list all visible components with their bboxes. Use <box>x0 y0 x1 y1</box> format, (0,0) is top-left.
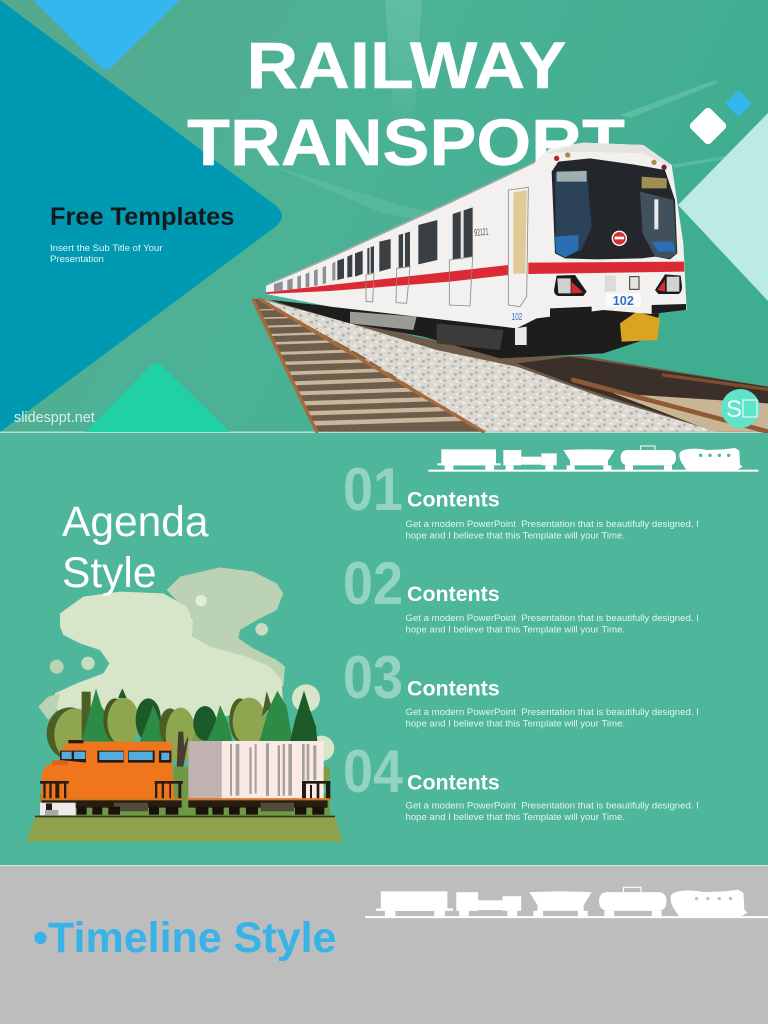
track bed <box>253 298 768 432</box>
lower black valance <box>550 307 592 317</box>
headlights <box>554 275 587 296</box>
cab door window <box>513 190 527 274</box>
contents heading 1: Contents <box>407 488 500 512</box>
shape: pale right triangle <box>678 113 768 301</box>
text: website: slidesppt.net <box>14 410 95 426</box>
locomotive windows <box>60 751 171 763</box>
title line two: TRANSPORT <box>187 105 625 179</box>
contents text 1: Get a modern PowerPoint Presentation that is beautifully designed. I <box>406 519 699 530</box>
number 01: 01 <box>343 456 403 523</box>
number 04: 04 <box>343 738 404 805</box>
number 02: 02 <box>343 550 403 617</box>
icon: white diamond <box>688 106 728 146</box>
icon: slides logo: S <box>726 396 742 423</box>
sleepers <box>258 309 473 423</box>
panel: title slide <box>0 0 768 433</box>
contents rows <box>343 456 699 823</box>
contents text 1: hope and I believe that this Template will your Time. <box>406 530 625 542</box>
shape: blue top triangle <box>33 0 180 70</box>
heading: agenda style: Agenda <box>62 499 209 546</box>
right track <box>517 357 768 432</box>
container railing <box>302 781 330 798</box>
photo: train on tracks <box>253 143 768 432</box>
photo: train on tracks: 102 <box>613 294 634 308</box>
text: subtitle: Presentation <box>50 254 104 265</box>
title: RAILWAY <box>246 28 566 102</box>
heading: agenda style: Style <box>62 550 156 597</box>
container <box>188 741 222 798</box>
locomotive railings <box>40 781 183 798</box>
panel: agenda slide <box>0 433 768 865</box>
icon: blue diamond <box>725 90 752 117</box>
ballast <box>260 299 717 432</box>
illustration: train in forest <box>27 567 343 842</box>
text: car number: 92121 <box>474 227 489 239</box>
ground <box>173 767 190 817</box>
side windows <box>337 207 473 280</box>
shape: green bottom triangle <box>85 364 230 432</box>
wheels <box>77 807 324 815</box>
locomotive body <box>42 742 174 798</box>
icon: train silhouette bottom <box>365 887 768 918</box>
heading: free templates: Free Templates <box>50 203 234 231</box>
rails <box>253 299 768 432</box>
photo: train on tracks: 102 <box>512 312 523 323</box>
panel: timeline slide <box>0 865 768 1024</box>
trees <box>47 707 93 759</box>
icon: slides logo <box>721 389 760 428</box>
contents text 2: hope and I believe that this Template will your Time. <box>406 624 625 636</box>
undercarriage <box>270 300 660 358</box>
heading: timeline style: •Timeline Style <box>33 914 336 962</box>
contents heading 4: Contents <box>407 770 500 794</box>
icon: train silhouette top <box>428 446 758 472</box>
text: subtitle: Insert the Sub Title of Your <box>50 243 163 254</box>
chassis <box>40 798 332 815</box>
red stripe <box>528 262 684 274</box>
contents heading 2: Contents <box>407 582 500 606</box>
steam clouds <box>167 567 285 687</box>
contents heading 3: Contents <box>407 676 500 700</box>
contents text 4: hope and I believe that this Template will your Time. <box>406 812 625 823</box>
front number plate <box>606 293 641 307</box>
shape: teal arrow panel <box>0 0 282 432</box>
contents text 2: Get a modern PowerPoint Presentation that is beautifully designed. I <box>406 613 699 624</box>
front black panel <box>552 158 677 259</box>
contents text 3: hope and I believe that this Template will your Time. <box>406 718 625 730</box>
contents text 4: Get a modern PowerPoint Presentation that is beautifully designed. I <box>406 800 699 812</box>
door outlines <box>366 187 528 307</box>
car body <box>266 143 687 328</box>
contents text 3: Get a modern PowerPoint Presentation that is beautifully designed. I <box>406 707 699 718</box>
number 03: 03 <box>343 644 403 711</box>
